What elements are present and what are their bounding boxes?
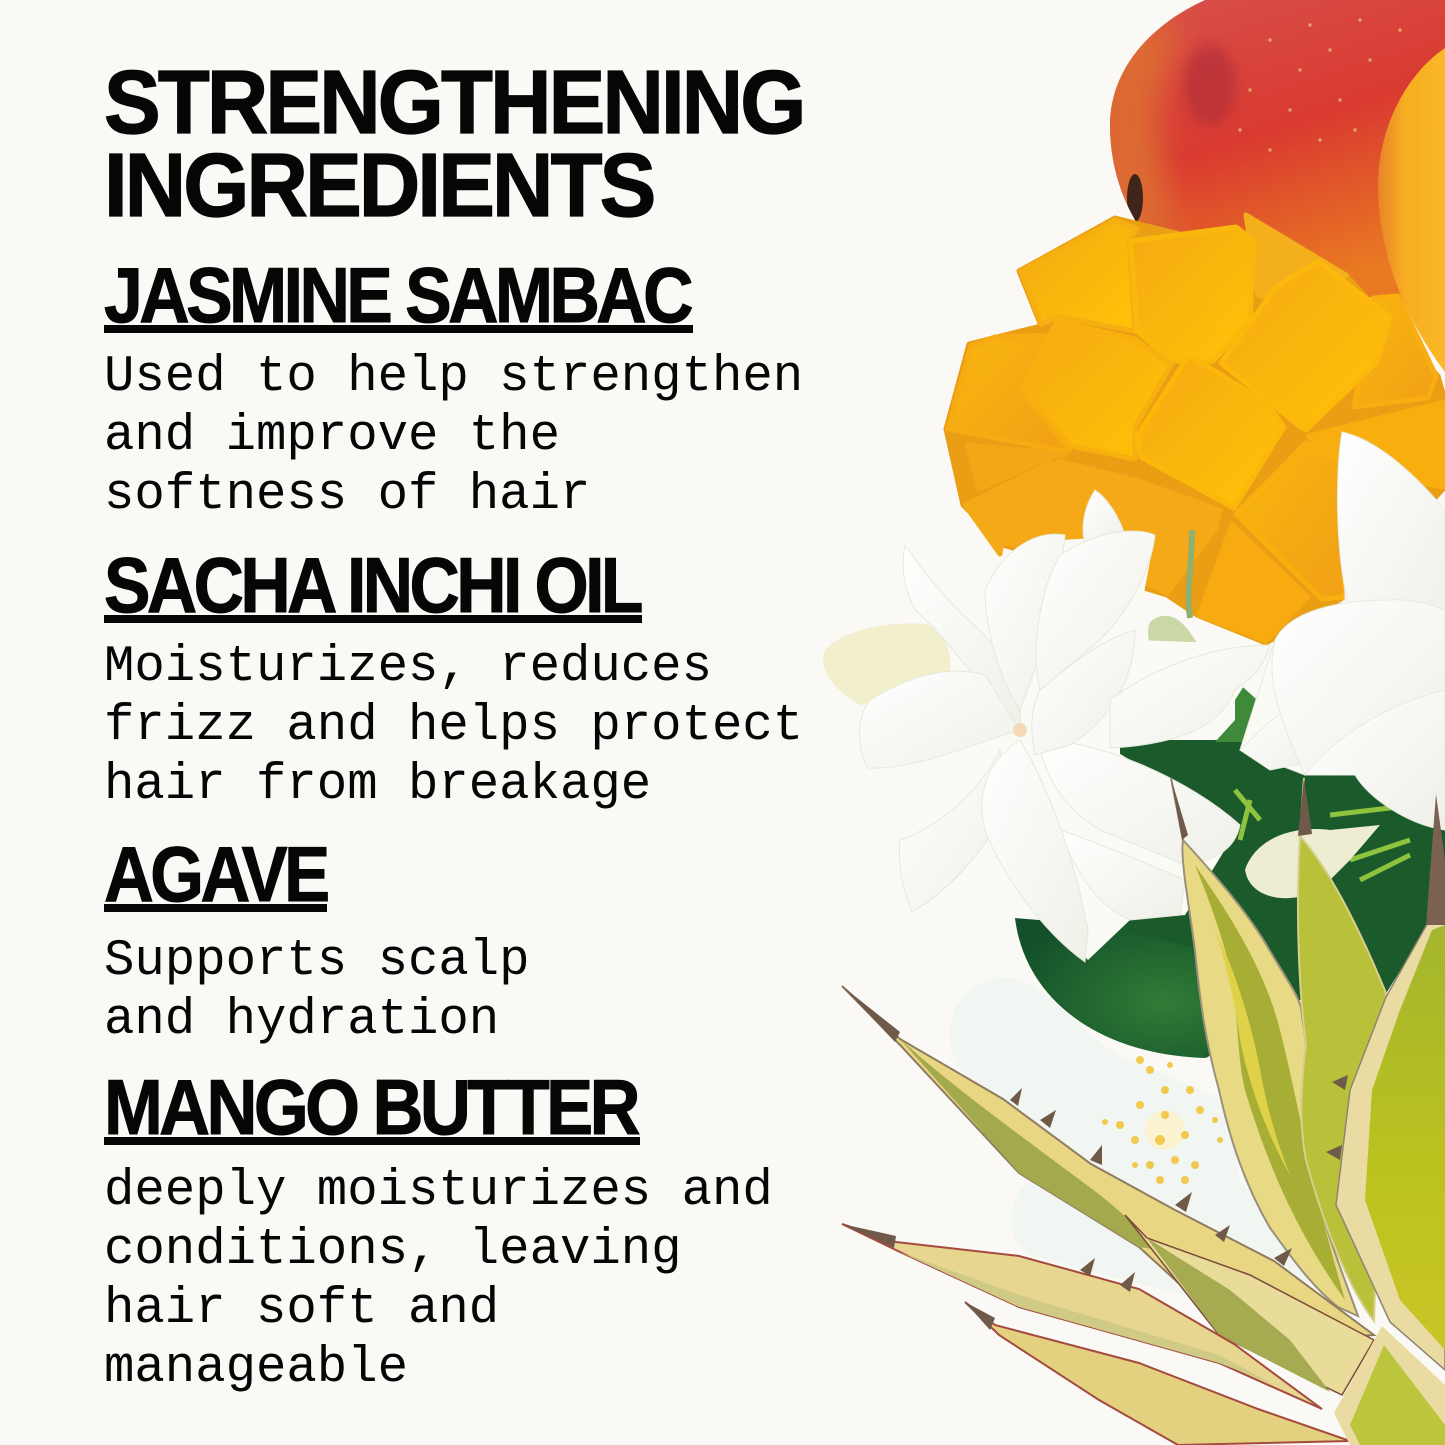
mango half <box>1378 48 1445 372</box>
jasmine bud right <box>1245 825 1380 898</box>
text: mango butter description: deeply moisturizes and conditions, leaving hair soft and manageable <box>104 1163 773 1397</box>
title: INGREDIENTS <box>104 136 653 236</box>
pale background flower <box>950 977 1320 1300</box>
leaf: bottom right <box>1334 1326 1445 1445</box>
text: agave description: Supports scalp and hydration <box>104 933 530 1049</box>
leaf: short lower centre <box>1125 1215 1374 1395</box>
illustration: ingredients collage <box>823 0 1445 1445</box>
leaf: bottom <box>965 1302 1350 1445</box>
heading: jasmine sambac: JASMINE SAMBAC <box>104 251 690 339</box>
agave plant <box>842 778 1445 1445</box>
leaf: large right <box>1336 794 1445 1370</box>
heading: sacha inchi oil: SACHA INCHI OIL <box>104 541 640 629</box>
jasmine flower: right <box>1240 432 1445 830</box>
jasmine flower: main <box>823 490 1270 962</box>
jasmine bud left <box>823 623 950 705</box>
whole mango <box>1090 0 1445 305</box>
leaf: tall left <box>1171 778 1358 1316</box>
leaf: lower left <box>842 1224 1322 1409</box>
heading: mango butter: MANGO BUTTER <box>104 1063 637 1151</box>
text: sacha inchi oil description: Moisturizes, reduces frizz and helps protect hair from breakage <box>104 639 803 814</box>
heading: agave: AGAVE <box>104 830 327 918</box>
leaf: narrow centre <box>1298 778 1386 1321</box>
foliage behind flowers <box>1015 530 1445 1058</box>
spines <box>842 778 1348 1330</box>
stamens <box>1102 1056 1223 1184</box>
leaf: long upper left <box>842 986 1374 1340</box>
title: STRENGTHENING <box>104 53 804 153</box>
title <box>104 53 804 236</box>
text: jasmine sambac description: Used to help strengthen and improve the softness of hair <box>104 349 803 524</box>
mango cubes <box>946 215 1445 643</box>
